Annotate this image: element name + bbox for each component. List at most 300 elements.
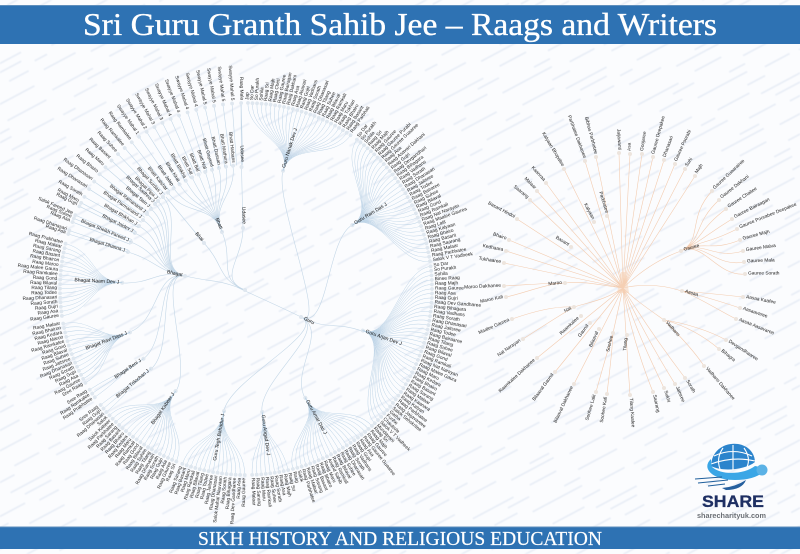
branch: Guru Ram Das: Raag Vadhans — [398, 159, 428, 182]
branch: Bhagat Kabir: Raag Basant — [99, 428, 123, 453]
branch: Guru Arjan Dev: Raag Kaanara — [402, 391, 431, 413]
labels reading from node: Gauree Poorabi — [673, 129, 693, 162]
inner labels: Bhatts and Bhagats: Bhatt Kalshar — [146, 166, 169, 192]
branch: Guru Arjan Dev: Raag Bihagara — [434, 304, 467, 313]
branch: Bhagat Naam Dev: Raag Sorath — [30, 299, 58, 307]
inner labels: Bhatts and Bhagats: Bhatt Mathura — [218, 133, 229, 164]
labels reading from node: Aasaa Kaafee — [745, 294, 777, 306]
branch: Guru Ram Das — [313, 120, 474, 289]
branch: Guru Amar Das: Raag Maru — [322, 460, 337, 484]
footer bar: SIKH HISTORY AND RELIGIOUS EDUCATION — [198, 528, 602, 550]
branch: Bhagat Ravi Das: Raag Malaar — [33, 321, 61, 332]
labels reading from node: Goojaree — [639, 131, 648, 151]
branch: Guru Amar Das: Raag Basant — [313, 463, 329, 492]
branch: Bhagat Ravi Das: Raag Gujri — [54, 369, 77, 384]
first-level nodes — [183, 165, 303, 319]
branch: Guru Amar Das: Raag Bhairo — [318, 462, 334, 489]
branch: Guru Amar Das: Salok — [296, 470, 305, 483]
inner labels: Bhatts and Bhagats: Bhagat Ramanand J — [108, 183, 147, 215]
branch: Guru Amar Das: Anand Sahib — [326, 458, 344, 485]
labels reading toward node: Soohee — [605, 335, 615, 353]
branch: Bhagat Trilochan: Raag Dhanasari — [76, 411, 106, 439]
labels reading toward node: Basant Hindol — [487, 200, 516, 220]
branch: Guru Arjan Dev: Mundavani — [375, 423, 396, 444]
branch: Guru Arjan Dev: Gatha — [388, 409, 402, 423]
branch: Guru Ram Das: Raag Gauree Purabi — [377, 122, 413, 157]
labels reading toward node: Tukhaaree — [478, 256, 502, 265]
labels reading from node: Gauree Bairaagan — [733, 197, 771, 220]
labels reading toward node: Kaanraa — [530, 165, 547, 183]
branch: Guru Nanak Dev: Raag Tukhari — [337, 99, 357, 127]
labels reading from node: Majh — [694, 163, 705, 175]
branch: Bhagat Naam Dev: Raag Maroo — [32, 259, 59, 268]
branch: Guru Arjan Dev: Raag Parbhatee — [397, 398, 429, 424]
labels reading toward node: Saarang — [512, 184, 530, 200]
labels reading toward node: Bibhas Parbhatee — [583, 116, 599, 155]
outer labels: Swayye and Bhagat raags: Swayye Mahal 4 — [153, 83, 173, 118]
outer labels: Swayye and Bhagat raags: Swayye Mahal 3 — [143, 87, 164, 122]
branch: Guru Ram Das: Raag Saarang — [430, 237, 461, 250]
branch: Guru Arjan Dev: Raag Ramkali — [422, 353, 452, 370]
outer labels: Swayye and Bhagat raags: Raag Ramkalee — [107, 111, 133, 142]
branch: Guru Tegh Bahadur: Raag Ramkali — [183, 470, 197, 501]
labels reading toward node: Maalee Gaurea — [478, 317, 511, 336]
branch: Guru Arjan Dev: Raag Gauree — [435, 286, 464, 292]
branch: Guru Amar Das: Raag Bilaval — [334, 453, 352, 480]
branch: Guru Arjan Dev: Raag Jaijavantee — [394, 402, 427, 430]
branch: Guru Amar Das: Raag Malaar — [305, 467, 319, 495]
links from centre — [504, 153, 745, 395]
labels reading toward node: Gaund — [577, 323, 590, 339]
outer labels: Swayye and Bhagat raags: Raag Maru — [84, 147, 106, 167]
branch: Bhagat Kabir — [87, 365, 212, 490]
outer labels: Swayye and Bhagat raags — [33, 65, 245, 236]
inner labels: Bhatts and Bhagats: Bhatt Harbans — [227, 132, 236, 164]
branch: Guru Tegh Bahadur: Raag Sarang — [168, 465, 184, 494]
outer labels: Swayye and Bhagat raags: Raag Gujri — [55, 192, 78, 207]
inner labels: Bhatts and Bhagats: Bhatt Kirat — [164, 161, 181, 184]
labels reading toward node — [464, 114, 629, 424]
outer labels: Swayye and Bhagat raags: Swayye Mahal 2 — [124, 98, 148, 131]
branch: Guru Tegh Bahadur: Raag Asa — [236, 477, 243, 499]
branch: Guru Ram Das: Raag Jaitsree — [406, 173, 435, 194]
branch: Guru Ram Das: Raag Majh — [370, 129, 391, 151]
branch: Guru Amar Das: Raag Ramkali — [330, 455, 349, 485]
branch: Guru Ram Das: Raag Dhanasari — [404, 166, 436, 190]
branch: Bhagat Ravi Das: Raag Suhee — [43, 352, 70, 367]
inner labels: Bhatts and Bhagats: Bhagat Pipa J — [133, 176, 159, 201]
branch: Guru Arjan Dev: Salok V T Vadheek — [378, 420, 412, 453]
branch: Guru Nanak Dev: Raag Majh — [268, 78, 277, 102]
logo: SHARE charity — [695, 444, 768, 520]
branch: Guru Angad Dev: Raag Sorath — [273, 475, 283, 503]
labels reading toward node: Maroo — [548, 280, 563, 287]
branch: Bhagat Kabir: Raag Dhanasari — [135, 453, 157, 486]
branch: Guru Ram Das: Raag Bairaree — [411, 182, 441, 202]
labels reading from node: Bihagra — [720, 348, 737, 363]
branch: Guru Arjan Dev: Raag Tilang — [428, 336, 454, 348]
icon: swoosh — [707, 459, 766, 480]
branch: Guru Arjan Dev: Raag Malee Gaura — [418, 362, 458, 384]
branch: Guru Ram Das: Raag Parbhatee — [432, 247, 467, 259]
outer labels: Swayye and Bhagat raags: Raag Sorath — [57, 179, 84, 198]
branch: Guru Arjan Dev: Raag Todee — [430, 327, 457, 338]
Bhatt fan — [163, 158, 257, 246]
outer labels: Swayye and Bhagat raags: Swayye Mahal 4 — [163, 79, 181, 114]
branch: Guru Tegh Bahadur: Raag Bilaval — [189, 471, 201, 499]
labels reading from node: Sukhi — [662, 390, 671, 403]
branch: Guru Nanak Dev: Raag Tilang — [317, 90, 332, 116]
branch: Guru Arjan Dev: Guru Arjan Dev J — [365, 329, 403, 347]
outer labels: Swayye and Bhagat raags: Raag Ramkalee — [98, 117, 126, 148]
labels reading from node: Gauree Malva — [745, 243, 776, 253]
first-level labels: Bhatt — [214, 217, 224, 231]
outer labels: Swayye and Bhagat raags: Swayye Mahal 4 — [184, 72, 199, 108]
branch: Bhagat Trilochan — [76, 362, 157, 439]
branch: Bhagat Naam Dev: Bhagat Naam Dev J — [74, 277, 120, 286]
branch: Guru Arjan Dev: Raag Malaar — [405, 387, 431, 407]
branch: Guru Ram Das: Raag Basant — [428, 232, 457, 245]
outer labels: Swayye and Bhagat raags: Swayye Mahal 5 — [194, 70, 208, 105]
branch: Guru Ram Das: Guru Ram Das J — [353, 202, 389, 226]
branch: Guru Nanak Dev: Raag Cheti — [272, 78, 282, 103]
labels reading from node: Vadhans Dakhanee — [704, 366, 736, 402]
outer labels: Swayye and Bhagat raags: Swayye Mahal 5 — [216, 66, 226, 102]
outer labels: Swayye and Bhagat raags: Raag Suhee — [96, 130, 119, 154]
inner labels: Bhatts and Bhagats: Bhagat Sain J — [124, 185, 152, 209]
branch: Guru Arjan Dev: Raag Kedara — [414, 370, 442, 389]
branch: Guru Arjan Dev: Chaubole — [382, 416, 401, 435]
branch: Guru Nanak Dev: Raag Dakhani — [286, 75, 299, 106]
branch: Bhagat Ravi Das: Raag Gond — [41, 343, 67, 356]
branch: Guru Arjan Dev: Funhe — [385, 413, 399, 427]
branch: Bhagat Kabir: Raag Asa — [155, 459, 169, 481]
outer labels: Swayye and Bhagat raags: Raag Bhairo — [75, 153, 100, 175]
branch: Guru Arjan Dev: Raag Asa — [435, 290, 456, 297]
branch: Guru Amar Das: Raag Suhee — [338, 451, 357, 477]
branch: Bhagat Naam Dev: Raag Dhanasari — [22, 294, 57, 302]
outer labels: Swayye and Bhagat raags: Raag Asa — [45, 224, 67, 236]
branch: Bhagat Ravi Das: Raag Kedara — [34, 330, 63, 342]
radial tree: raags and sub-raags — [464, 114, 798, 428]
branch: Guru Tegh Bahadur — [168, 403, 257, 524]
labels reading toward node: Soohee Kafi — [599, 396, 609, 423]
branch: Guru Arjan Dev: Raag Bairaaree — [429, 331, 463, 345]
branch: Guru Ram Das: Raag Suhee — [413, 188, 440, 206]
branch: Guru Angad Dev: Raag Majh — [282, 473, 293, 498]
branch: Guru Tegh Bahadur: Raag Gauree — [241, 478, 247, 507]
labels reading from node: Devgandhaaree — [727, 339, 759, 363]
labels reading from node: Gauree Mala — [747, 257, 775, 264]
labels reading toward node: Raamkalee Dakhanee — [498, 357, 537, 394]
branch: Guru Ram Das: Raag Maalee Gaurea — [423, 206, 468, 227]
branch: Guru Nanak Dev: Raag Asa — [290, 85, 301, 107]
branch: Guru Amar Das: Raag Dhanasari — [342, 448, 366, 481]
branch: Guru Ram Das: So Dar — [356, 123, 370, 139]
branch: Guru Ram Das: Raag Sorath — [401, 166, 427, 186]
branch: Guru Nanak Dev: Raag Sorath — [308, 85, 323, 112]
branch: Guru Ram Das: Raag Todee — [409, 180, 434, 198]
labels reading from node: Vadhans — [664, 320, 681, 338]
first-level labels — [166, 207, 315, 326]
inner labels: Bhatts and Bhagats: Udasee — [238, 145, 245, 162]
branch: Bhagat Ravi Das: Raag Gauree — [54, 377, 82, 396]
branch: Guru Nanak Dev: Jap — [244, 92, 251, 100]
inner labels: Bhatts and Bhagats: Bhatt Bal — [188, 152, 201, 173]
branch: Guru Amar Das: Raag Gujri — [354, 441, 372, 463]
branch: Guru Nanak Dev: Sohila — [258, 87, 265, 101]
branch: Guru Ram Das: Raag Sri — [367, 130, 384, 148]
branch: Guru Angad Dev — [242, 407, 296, 507]
labels reading from node: Asa — [626, 142, 632, 151]
branch: Guru Angad Dev: Raag Sarang — [254, 477, 262, 506]
labels reading from node: Jaitsree — [674, 385, 686, 404]
branch: Bhagat Ravi Das: Sree Raag — [61, 381, 84, 398]
branch: Guru Nanak Dev: Raag Asavari — [295, 79, 308, 108]
branch: Bhagat Beni: Bhagat Beni J — [114, 358, 143, 380]
branch: Bhagat Ravi Das: Raag Asa — [58, 373, 80, 388]
branch: Bhagat Kabir: Raag Gond — [122, 442, 141, 466]
branch: Bhagat Naam Dev: Raag Sarang — [32, 243, 62, 254]
outer labels: Swayye and Bhagat raags: Swayye Mahal 3 — [133, 92, 156, 126]
branch: Bhagat Kabir: Salok — [96, 414, 109, 427]
branch: Guru Arjan Dev: Raag Dhanasari — [432, 318, 467, 330]
branch: Bhagat Ravi Das: Bhagat Ravi Dass J — [85, 330, 129, 352]
branch: Guru Ram Das: Raag Gond — [417, 199, 442, 214]
branch: Bhagat Naam Dev: Raag Malee Gaura — [17, 263, 59, 273]
branch: Guru Ram Das: Raag Bhairo — [427, 228, 455, 241]
labels reading from node: Tilang Kaafee — [628, 398, 636, 428]
branch: Guru Tegh Bahadur: Guru Tegh Bahadur J — [212, 413, 227, 461]
branch: Bhagat Naam Dev: Raag Gujri — [35, 304, 58, 312]
inner labels: Bhatts and Bhagats: Bhatt Gayand — [201, 138, 215, 168]
branch: Bhagat Ravi Das: Raag Dhanasari — [39, 361, 73, 380]
labels reading toward node: Kalyaan Bhopalee — [540, 131, 566, 168]
branch: Bhagat Naam Dev: Raag Tilang — [31, 285, 57, 291]
labels reading toward node: Parbhatee Dakhanee — [566, 114, 587, 159]
branch: Guru Nanak Dev: Raag Bairagan — [281, 72, 294, 105]
branch: Guru Tegh Bahadur: Raag Todee — [199, 473, 211, 500]
inner labels: Bhatts and Bhagats: Bhagat Jaidev J — [101, 213, 135, 234]
branch: Guru Nanak Dev: Raag Vadhans — [304, 79, 320, 111]
inner labels: Bhatts and Bhagats: Bhagat Bhikhan J — [103, 203, 139, 227]
inner labels: Bhatts and Bhagats: Bhatt Nal — [195, 149, 208, 170]
branch: Guru Ram Das: Raag Lalit — [424, 219, 447, 232]
branch: Guru Nanak Dev: Raag Sri — [263, 82, 271, 101]
labels reading toward node: Bhairo — [492, 231, 508, 242]
branch: Bhagat Ravi Das: Raag Ramkalee — [31, 339, 66, 354]
branch: Guru Nanak Dev: So Dar — [249, 85, 256, 100]
inner labels: Bhatts and Bhagats — [80, 132, 245, 254]
branch: Bhagat Trilochan: Raag Gujri — [81, 408, 103, 427]
branch: Guru Amar Das: Raag Parbhatee — [300, 468, 316, 504]
branch: Bhagat Trilochan: Bhagat Trilochan J — [115, 368, 151, 400]
branch: Guru Angad Dev: Raag Ramkali — [264, 477, 273, 507]
branch: Bhagat Beni: Raag Ramkalee — [59, 392, 91, 417]
branch: Guru Tegh Bahadur: Raag Tilang — [194, 472, 206, 499]
labels reading from node: Gauree Deepakee — [650, 115, 667, 155]
branch: Guru Tegh Bahadur: Raag Maru — [180, 468, 193, 493]
labels reading toward node: Bilaaval Gaund — [531, 372, 555, 402]
labels reading from node: Aasaa — [684, 289, 699, 298]
branch: Guru Tegh Bahadur: Raag Jaitsree — [204, 474, 215, 505]
outer labels: Swayye and Bhagat raags: Raag Maru — [56, 187, 80, 204]
labels reading from node: Gauree Guaarairee — [712, 158, 746, 191]
branch: Bhagat Naam Dev: Raag Basant — [32, 248, 61, 259]
branch: Guru Amar Das: Raag Sri — [372, 426, 389, 444]
branch: Guru Arjan Dev: Raag Maru — [416, 366, 440, 382]
first-level labels: Bhai — [194, 231, 205, 243]
branch: Guru Arjan Dev: Raag Kalyan — [399, 395, 426, 415]
branch: Guru Tegh Bahadur: Raag Dev Gandharee — [229, 477, 238, 524]
outer labels: Swayye and Bhagat raags: Raag Mala — [238, 77, 245, 100]
branch: Guru Ram Das: Raag Asavari Dakhani — [387, 132, 427, 167]
branch: Guru Ram Das: Raag Bilaval — [415, 193, 442, 210]
labels reading toward node: Maroo Dakhanee — [464, 283, 501, 291]
branch: Guru Arjan Dev: Raag Majh — [435, 280, 459, 287]
branch: Guru Arjan Dev: Raag Bilaval — [425, 345, 452, 359]
inner labels: Bhatts and Bhagats: Bhatt Sal — [180, 156, 194, 176]
branch: Bhagat Naam Dev: Raag Gond — [33, 275, 58, 282]
inner labels: Bhatts and Bhagats: Bhagat Parmanand J — [102, 190, 143, 220]
outer labels: Swayye and Bhagat raags: Swayye Mahal 4 — [173, 75, 190, 111]
branch: Guru Nanak Dev: Raag Bilaval — [325, 93, 342, 120]
icon: leaf badge — [756, 464, 768, 476]
inner labels: Bhatts and Bhagats: Bhagat Surdas J — [135, 166, 164, 197]
branch: Bhagat Kabir: Raag Sri — [165, 463, 178, 482]
branch: Bhagat Ravi Das: Raag Bilaval — [41, 348, 68, 362]
branch: Guru Nanak Dev: Raag Parbhati — [349, 105, 372, 134]
first-level links from root — [122, 103, 362, 412]
branch: Guru Arjan Dev: Raag Dev Gandharee — [434, 299, 482, 309]
branch: Guru Amar Das: Raag Sarang — [309, 465, 324, 494]
branch: Bhagat Kabir: Raag Kedara — [107, 434, 130, 460]
labels reading from node: Gauree Dakhani — [719, 174, 750, 200]
branch: Bhagat Ravi Das: Raag Bhairon — [32, 325, 62, 337]
labels reading toward node: Tilang — [622, 337, 629, 351]
labels reading from node: Dhanasari — [662, 135, 675, 158]
branch: Guru Arjan Dev: Raag Gond — [423, 349, 449, 363]
branch: Guru Angad Dev: Guru Angad Dev J — [260, 415, 271, 456]
branch: Guru Arjan Dev: Raag Suhee — [426, 340, 454, 354]
inner labels: Bhatts and Bhagats: Bhatt Dassan — [210, 136, 222, 166]
labels reading toward node: Nat Narayan — [496, 338, 522, 358]
branch: Guru Amar Das: Raag Majh — [369, 429, 389, 451]
labels reading toward node: Bilaaval Dakhanee — [553, 385, 575, 424]
title bar: Sri Guru Granth Sahib Jee – Raags and Writers — [83, 6, 717, 42]
branch: Bhagat Naam Dev: Raag Malaar — [34, 238, 63, 250]
labels reading from node: Sorath — [684, 379, 697, 394]
branch: Guru Tegh Bahadur: Raag Basant — [174, 466, 188, 495]
branch: Guru Amar Das: Raag Gauree — [365, 432, 388, 458]
branch: Guru Tegh Bahadur: Raag Sorath — [220, 476, 229, 504]
icon: globe — [711, 444, 755, 470]
labels reading from node: Aasaavaree — [742, 306, 768, 320]
branch: Guru Ram Das: Raag Bihagara — [396, 154, 425, 178]
inner labels: Bhatts and Bhagats: Bhagat Sadhna J — [124, 175, 156, 205]
branch: Bhagat Kabir: Bhagat Kabeer J — [150, 391, 177, 426]
branch: Guru Arjan Dev: Raag Bhairo — [412, 375, 438, 393]
branch: Guru Arjan Dev: Raag Gujri — [435, 295, 458, 302]
branch: Bhagat Naam Dev: Raag Bhairon — [30, 253, 60, 264]
branch: Guru Amar Das: Raag Sorath — [346, 446, 366, 472]
branch: Guru Arjan Dev: Sohila — [434, 271, 448, 278]
branch: Guru Amar Das: Raag Asa — [358, 438, 375, 458]
branch: Guru Angad Dev: Raag Suhee — [268, 476, 278, 503]
branch: Guru Nanak Dev: Raag Bhairo — [341, 103, 361, 129]
branch: Guru Arjan Dev: Raag Sorath — [433, 313, 460, 323]
branch: Guru Amar Das: Raag Vadhans — [350, 443, 373, 473]
outer labels: Swayye and Bhagat raags: Raag Suhee — [46, 204, 73, 220]
branch: Guru Ram Das: Raag Ramkali — [419, 202, 449, 219]
branch: Bhagat Kabir: Salok Kabeer — [87, 418, 113, 443]
first-level labels: Bhagat — [166, 269, 184, 279]
inner labels: Bhatts and Bhagats: Bhatt Bhikha — [169, 153, 187, 180]
labels reading from node: Suhi — [684, 157, 694, 168]
branch: Guru Arjan Dev: Raag Nat Narayan — [420, 358, 459, 379]
nodes — [502, 151, 747, 397]
branch: Guru Arjan Dev: Raag Vadhans — [433, 309, 466, 318]
branch: Guru Arjan Dev: Binee Raag — [435, 275, 460, 282]
branch: Guru Angad Dev: Raag Maru — [259, 477, 267, 502]
labels reading toward node: Raamkalee — [559, 315, 581, 336]
branch: Guru Arjan Dev: Raag Jaitsree — [431, 322, 461, 334]
outer labels: Swayye and Bhagat raags: Raag Dhanasari — [56, 166, 88, 190]
outer radial links: Swayye and Bhagat raags — [66, 101, 245, 254]
labels reading from node: Gauree Majh — [742, 229, 771, 242]
branch: Bhagat Kabir: Raag Suhee — [129, 448, 149, 474]
branch: Guru Ram Das: Raag Nat Narayan — [421, 203, 460, 223]
branch: Guru Ram Das: Raag Gauree — [374, 129, 398, 154]
branch: Guru Amar Das: Raag — [291, 471, 300, 484]
branch: Bhagat Beni: Raag Prabhatee — [62, 396, 94, 421]
branch: Bhagat Kabir: Raag Bilaval — [125, 445, 145, 471]
branch: Guru Angad Dev: Raag Sri — [286, 472, 296, 492]
branch: Guru Arjan Dev: Raag Basant — [409, 379, 437, 398]
branch: Guru Angad Dev: Raag Malaar — [250, 478, 257, 506]
branch: Bhagat Kabir: Raag Ramkali — [114, 440, 137, 468]
branch: Bhagat Ravi Das: Raag Sorath — [48, 365, 76, 382]
branch: Guru Amar Das: Raag Gauree Guaaree — [361, 435, 397, 477]
branch: Guru Arjan Dev — [332, 250, 482, 453]
outer labels: Swayye and Bhagat raags: Raag Basant — [88, 137, 112, 161]
branch: Bhagat Kabir: Raag Gujri — [149, 457, 165, 480]
wordmark: SHARE — [702, 492, 764, 511]
title bar — [0, 5, 800, 44]
branch: Guru Nanak Dev: Raag Ramkali — [329, 92, 348, 122]
branch: Guru Ram Das: Raag Devgandhari — [393, 145, 428, 175]
centre glow — [617, 272, 629, 293]
labels reading toward node: Basant — [554, 235, 571, 248]
outer labels: Swayye and Bhagat raags: Salok Fareed Jee — [37, 196, 74, 216]
branch: Guru Ram Das: Raag Kalyaan — [426, 221, 457, 236]
branch: Guru Amar Das — [263, 374, 397, 504]
Bhagat upper links — [126, 195, 185, 276]
branch: Guru Ram Das: Salok V T Vadheek — [432, 251, 474, 263]
branch: Guru Nanak Dev: Raag Gauree — [277, 74, 288, 104]
footer bar — [0, 526, 800, 550]
branch: Guru Ram Das: Sohila — [363, 130, 377, 145]
branch: Guru Nanak Dev: Raag Suhee — [321, 91, 338, 118]
branch: Bhagat Naam Dev: Raag Gauree — [30, 313, 60, 323]
branch: Bhagat Naam Dev: Raag Ramkalee — [23, 269, 58, 277]
inner labels: Bhatts and Bhagats: Bhagat Sheikh Fareed J — [80, 218, 130, 244]
first-level labels: Udasee — [240, 207, 247, 224]
branch: Bhagat Ravi Das — [31, 300, 143, 398]
branch: Guru Tegh Bahadur: Raag Bihagara — [225, 477, 233, 510]
branch: Guru Nanak Dev — [229, 72, 372, 189]
labels reading toward node: Malaar — [523, 176, 538, 191]
